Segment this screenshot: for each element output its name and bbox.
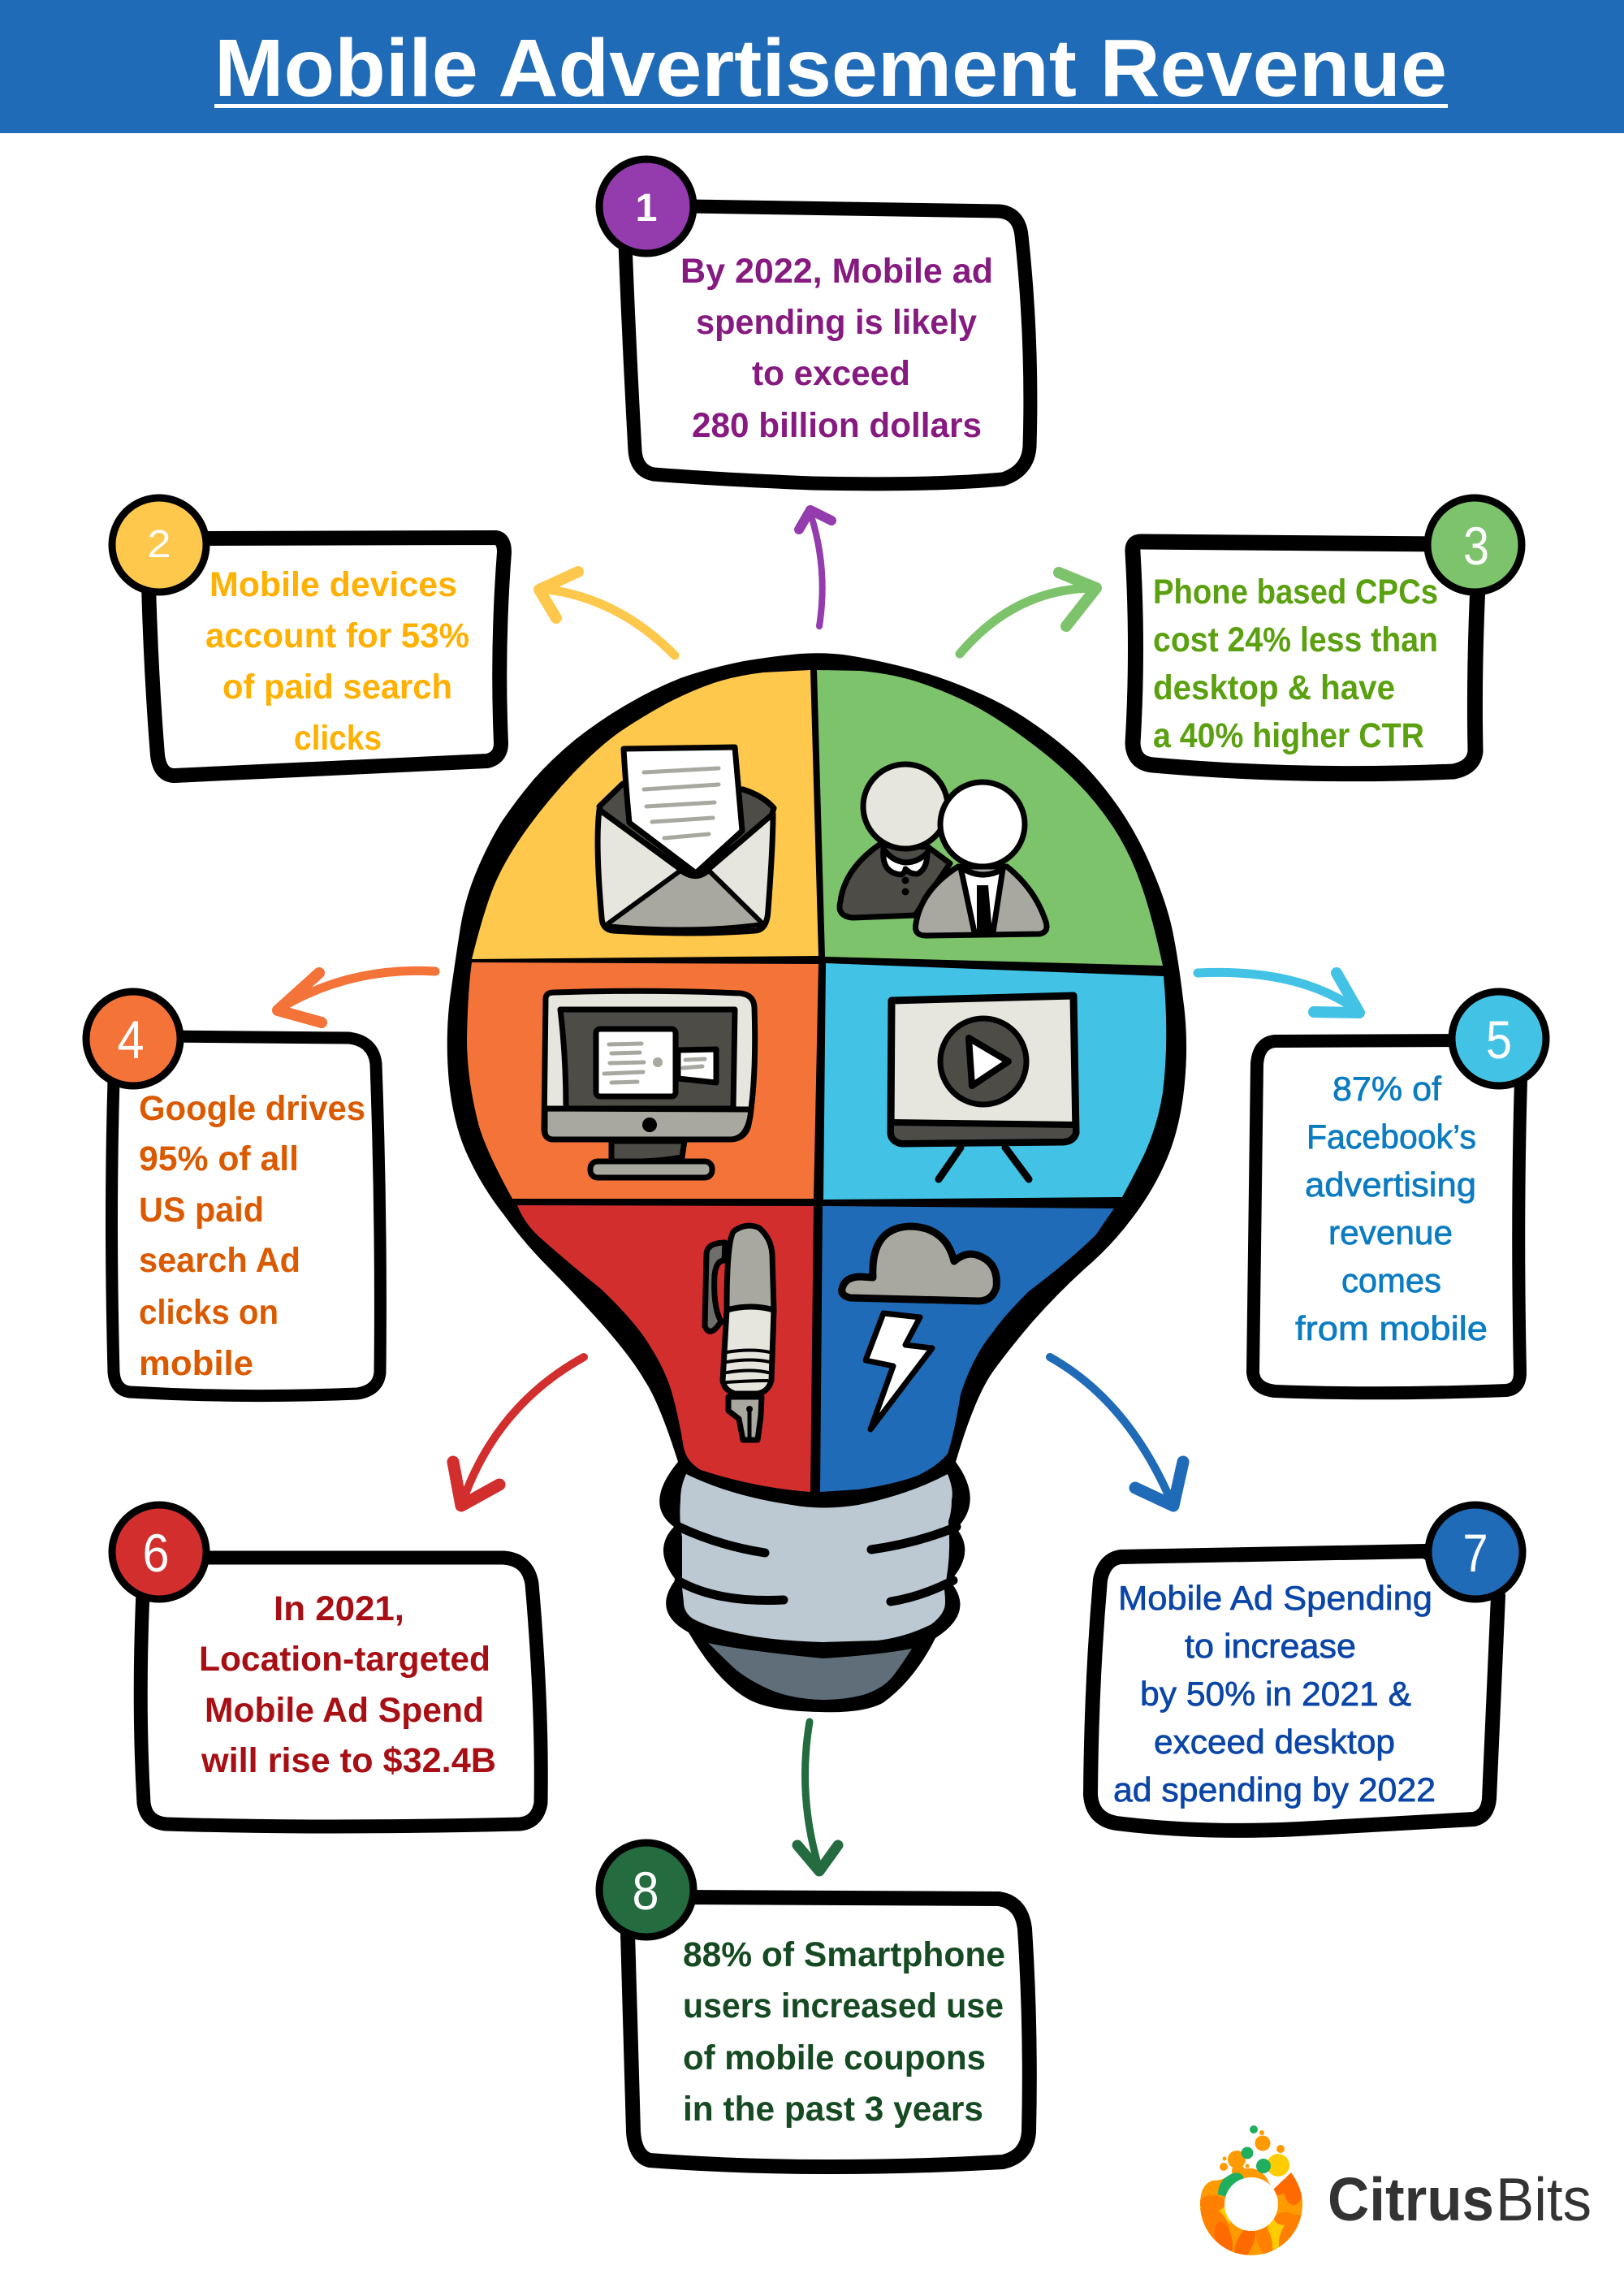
text 1 [680, 252, 993, 445]
badge 8 [599, 1843, 693, 1937]
arrow 4 orange [278, 971, 435, 1022]
panel 2 [112, 498, 504, 776]
text 8: of mobile coupons [683, 2038, 986, 2077]
icon: envelope [598, 747, 774, 933]
text 7: ad spending by 2022 [1113, 1770, 1436, 1809]
icon: storm cloud and lightning [842, 1226, 996, 1429]
bulb screw base [679, 1474, 957, 1642]
text 6: Mobile Ad Spend [205, 1691, 484, 1730]
badge 7: 7 [1463, 1523, 1488, 1583]
text 6: In 2021, [274, 1589, 404, 1628]
text 4 [139, 1089, 365, 1383]
panel 4 [86, 992, 380, 1396]
text 5: 87% of [1332, 1070, 1441, 1108]
quadrant orange [467, 962, 818, 1199]
text 4: Google drives [139, 1089, 365, 1128]
arrow 7 blue [1050, 1357, 1183, 1506]
arrow 6 red [453, 1357, 584, 1506]
text 1: to exceed [752, 354, 910, 393]
icon: video screen with play button [891, 996, 1076, 1179]
logo mark [1200, 2125, 1302, 2255]
text 3 [1153, 573, 1438, 755]
text 8: in the past 3 years [683, 2090, 983, 2129]
text 2: account for 53% [205, 616, 469, 655]
badge 5 [1452, 992, 1546, 1086]
icon: two people [840, 764, 1047, 936]
badge 2: 2 [148, 523, 171, 566]
text 5 [1295, 1070, 1488, 1347]
text 7: exceed desktop [1154, 1723, 1395, 1761]
arrow 3 green [960, 573, 1096, 654]
logo wordmark [1328, 2165, 1592, 2233]
badge 6 [112, 1505, 206, 1599]
quadrant cyan [823, 963, 1166, 1200]
text 3: cost 24% less than [1153, 620, 1438, 659]
text 8: 88% of Smartphone [683, 1935, 1005, 1974]
text 7: to increase [1185, 1627, 1356, 1665]
quadrant green [817, 670, 1163, 966]
text 8: users increased use [683, 1987, 1004, 2025]
text 5: from mobile [1295, 1309, 1488, 1347]
header banner [0, 0, 1624, 133]
quadrant blue [820, 1206, 1114, 1492]
text 4: mobile [139, 1344, 253, 1383]
arrow 2 yellow [539, 572, 675, 655]
logo wordmark: Bits [1496, 2165, 1592, 2233]
text 3: a 40% higher CTR [1153, 716, 1424, 755]
badge 5: 5 [1486, 1009, 1512, 1070]
panel 1 [599, 159, 1030, 484]
quadrant red [517, 1205, 814, 1492]
text 2: clicks [294, 719, 382, 758]
text 4: clicks on [139, 1293, 279, 1332]
arrow 1 purple [799, 510, 831, 626]
badge 1 [599, 159, 693, 253]
text 5: comes [1341, 1261, 1441, 1299]
text 4: US paid [139, 1191, 264, 1230]
text 1: spending is likely [696, 303, 977, 342]
text 2: of paid search [222, 668, 452, 707]
text 7: Mobile Ad Spending [1118, 1579, 1432, 1617]
panel 7 [1091, 1505, 1522, 1831]
panel 6 [112, 1505, 541, 1827]
badge 3 [1427, 498, 1522, 592]
badge 3: 3 [1463, 516, 1489, 576]
title: Mobile Advertisement Revenue [214, 23, 1447, 114]
badge 1: 1 [635, 187, 658, 230]
text 3: desktop & have [1153, 668, 1395, 707]
text 5: Facebook’s [1307, 1118, 1476, 1156]
text 6: Location-targeted [199, 1640, 490, 1679]
text 2: Mobile devices [209, 565, 457, 604]
badge 2 [112, 498, 206, 592]
text 6 [199, 1589, 496, 1780]
logo: CitrusBits [1187, 2125, 1592, 2263]
badge 4 [86, 992, 180, 1086]
arrow 8 dark green [797, 1722, 838, 1871]
light bulb [447, 653, 1186, 1712]
text 4: 95% of all [139, 1139, 299, 1178]
arrow 5 cyan [1198, 972, 1359, 1013]
text 1: By 2022, Mobile ad [680, 252, 993, 291]
panel 8 [599, 1843, 1030, 2167]
badge 4: 4 [117, 1009, 145, 1070]
text 8 [683, 1935, 1005, 2129]
icon: desktop monitor [544, 991, 755, 1178]
panel 5 [1253, 992, 1546, 1393]
panel 3 [1133, 498, 1522, 774]
quadrant yellow [472, 670, 818, 959]
text 7 [1113, 1579, 1436, 1809]
text 3: Phone based CPCs [1153, 573, 1438, 612]
bulb cap [708, 1643, 912, 1700]
badge 7 [1428, 1505, 1522, 1599]
text 7: by 50% in 2021 & [1140, 1675, 1411, 1713]
text 5: revenue [1328, 1213, 1453, 1252]
icon: marker pen [705, 1226, 774, 1440]
text 1: 280 billion dollars [692, 406, 982, 445]
badge 6: 6 [143, 1523, 169, 1583]
text 2 [205, 565, 469, 758]
text 5: advertising [1305, 1165, 1476, 1204]
badge 8: 8 [632, 1861, 659, 1921]
logo wordmark: Citrus [1328, 2165, 1494, 2233]
text 6: will rise to $32.4B [201, 1741, 496, 1780]
text 4: search Ad [139, 1241, 300, 1280]
